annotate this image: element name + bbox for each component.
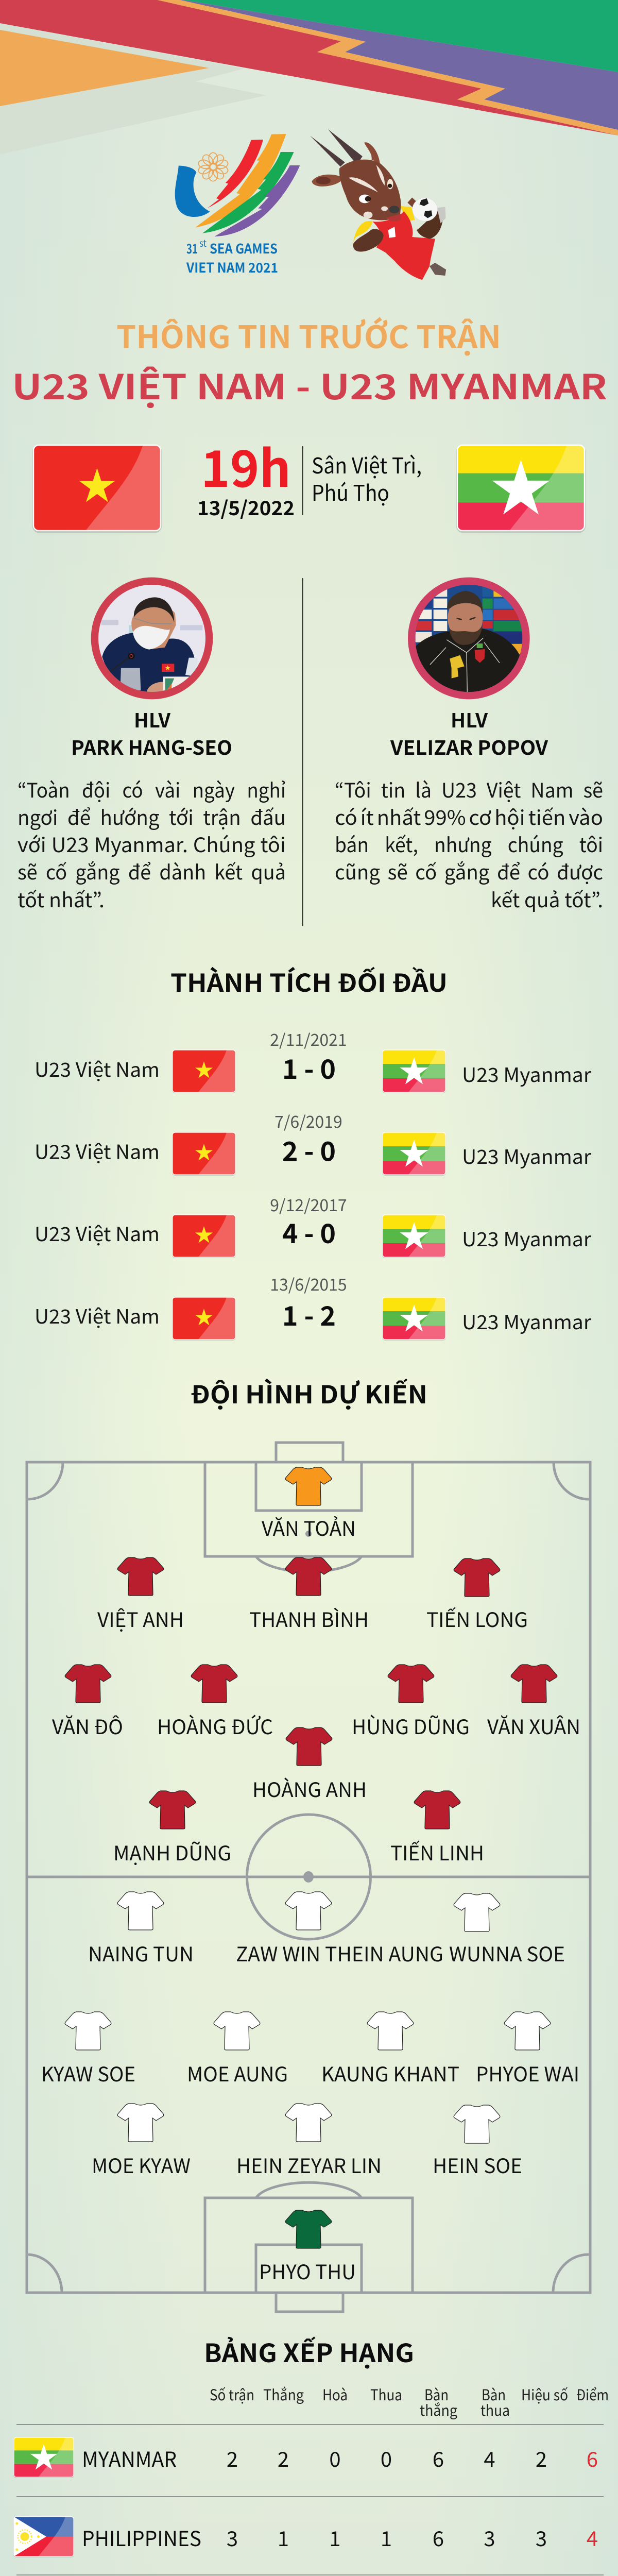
head-to-head match 13/6/2015: U23 Việt Nam [35,1301,160,1329]
table header: Hiệu số [521,2383,568,2405]
row Philippines: 3 [227,2522,238,2552]
player Zaw Win Thein Aung: ZAW WIN THEIN AUNG [236,1939,443,1968]
quote: bán kết, nhưng chúng tôi [335,829,603,858]
head-to-head match 13/6/2015: 1 - 2 [282,1295,336,1333]
title line 2: U23 VIỆT NAM - U23 MYANMAR [12,360,607,410]
head-to-head match 13/6/2015: U23 Myanmar [462,1307,591,1335]
goalkeeper Phyo Thu [259,2210,356,2285]
Vietnam lineup [52,1467,580,1867]
player Hùng Dũng: HÙNG DŨNG [352,1711,470,1740]
mascot: sao la with football [310,129,446,280]
goalkeeper Văn Toản [262,1467,356,1542]
player Thanh Bình: THANH BÌNH [249,1604,369,1633]
row Myanmar [13,2437,598,2478]
player Mạnh Dũng: MẠNH DŨNG [113,1838,231,1867]
coach title: HLV [451,705,488,733]
row Philippines: 3 [484,2522,495,2552]
quote: ngơi để hướng tới trận đấu [18,802,286,831]
table header: Thắng [263,2383,304,2405]
standings table [13,2383,609,2576]
head-to-head match 9/12/2017: U23 Myanmar [462,1224,591,1252]
player Tiến Long [426,1558,528,1633]
match date: 13/5/2022 [197,493,295,521]
logo mark swooshes [175,134,300,236]
row Myanmar: 0 [381,2443,392,2473]
player Hoàng Đức: HOÀNG ĐỨC [157,1711,273,1740]
player Zaw Win Thein Aung [236,1892,443,1968]
row Philippines: 3 [536,2522,547,2552]
head-to-head match 7/6/2019 [35,1109,591,1176]
player Văn Xuân [487,1665,580,1740]
logo text superscript: st [199,236,207,250]
flag: Myanmar large [456,445,586,533]
quote: cũng sẽ cố gắng để có được [335,857,603,886]
panel: coach Velizar Popov [335,578,603,913]
coach name: PARK HANG-SEO [71,732,232,760]
row Myanmar: 6 [433,2443,444,2473]
player Naing Tun: NAING TUN [88,1939,194,1968]
portrait: Park Hang-seo [91,578,213,699]
row Myanmar: 0 [329,2443,341,2473]
logo text sea games: SEA GAMES [210,239,278,258]
player Văn Xuân: VĂN XUÂN [487,1711,580,1740]
venue line 2: Phú Thọ [312,476,389,507]
player Văn Đô: VĂN ĐÔ [52,1711,123,1740]
match time: 19h [201,429,291,502]
table header: Số trận [210,2383,254,2405]
title line 1: THÔNG TIN TRƯỚC TRẬN [116,312,501,358]
quote: với U23 Myanmar. Chúng tôi [18,829,286,858]
row Philippines: PHILIPPINES [82,2522,201,2552]
player Hein Soe: HEIN SOE [433,2150,522,2179]
table header: thua [480,2399,510,2420]
player Wunna Soe [449,1893,565,1968]
row Philippines: 1 [278,2522,289,2552]
player Phyoe Wai: PHYOE WAI [476,2059,579,2088]
row Myanmar: MYANMAR [82,2443,177,2473]
player Hein Zeyar Lin: HEIN ZEYAR LIN [236,2150,382,2179]
player Hein Soe [433,2105,522,2179]
quote: có ít nhất 99% cơ hội tiến vào [335,802,603,831]
row Philippines: 4 [587,2522,598,2552]
row Myanmar: 2 [536,2443,547,2473]
table header: thắng [420,2399,457,2420]
head-to-head match 13/6/2015 [35,1272,591,1341]
player Kyaw Soe: KYAW SOE [41,2059,135,2088]
football pitch [27,1443,590,2312]
table header [210,2383,609,2420]
player Hoàng Anh [252,1727,367,1803]
quote: kết quả tốt”. [491,885,603,913]
venue line 1: Sân Việt Trì, [312,449,422,480]
head-to-head match 2/11/2021: U23 Myanmar [462,1059,591,1088]
player Kaung Khant [321,2012,459,2088]
head-to-head match 9/12/2017: U23 Việt Nam [35,1218,160,1247]
player Mạnh Dũng [113,1791,231,1867]
Myanmar lineup [41,1892,579,2285]
row Philippines: 6 [433,2522,444,2552]
player Tiến Linh [390,1791,484,1867]
player Tiến Linh: TIẾN LINH [390,1838,484,1867]
head-to-head match 2/11/2021: 1 - 0 [282,1048,336,1087]
heading: head-to-head: THÀNH TÍCH ĐỐI ĐẦU [170,963,448,999]
player Hùng Dũng [352,1665,470,1740]
quote: “Tôi tin là U23 Việt Nam sẽ [335,775,603,804]
head-to-head match 9/12/2017: 4 - 0 [282,1212,336,1251]
player Wunna Soe: WUNNA SOE [449,1939,565,1968]
player Naing Tun [88,1892,194,1968]
vertical divider between coaches [302,578,303,926]
goalkeeper Phyo Thu: PHYO THU [259,2257,356,2285]
row Myanmar: 6 [587,2443,598,2473]
head-to-head match 13/6/2015: 13/6/2015 [270,1272,347,1296]
quote [18,775,286,913]
head-to-head match 9/12/2017 [35,1193,591,1258]
goalkeeper Văn Toản: VĂN TOẢN [262,1513,356,1542]
quote: tốt nhất”. [18,885,105,913]
head-to-head match 7/6/2019: U23 Việt Nam [35,1137,160,1164]
player Việt Anh: VIỆT ANH [97,1604,184,1633]
player Hein Zeyar Lin [236,2104,382,2179]
row Philippines: 1 [329,2522,341,2552]
player Việt Anh [97,1557,184,1633]
table header: Bàn [482,2383,506,2405]
head-to-head match 2/11/2021 [35,1027,591,1093]
flag: Vietnam large [32,445,162,533]
player Kaung Khant: KAUNG KHANT [321,2059,459,2088]
logo text line 1: 31 [186,239,198,258]
panel: coach Park Hang-seo [18,578,286,913]
player Moe Aung: MOE AUNG [187,2059,288,2088]
player Moe Aung [187,2012,288,2088]
head-to-head match 7/6/2019: 2 - 0 [282,1130,336,1168]
player Thanh Bình [249,1557,369,1633]
top decorative colour bands [0,0,618,155]
table header: Bàn [424,2383,449,2405]
row Myanmar: 2 [278,2443,289,2473]
player Hoàng Đức [157,1665,273,1740]
player Phyoe Wai [476,2012,579,2088]
divider [302,446,303,515]
player Kyaw Soe [41,2012,135,2088]
player Tiến Long: TIẾN LONG [426,1604,528,1633]
head-to-head match 7/6/2019: 7/6/2019 [274,1109,342,1133]
table header: Hoà [322,2383,348,2405]
quote [335,775,603,913]
player Hoàng Anh: HOÀNG ANH [252,1774,367,1803]
row Myanmar: 4 [484,2443,495,2473]
head-to-head match 7/6/2019: U23 Myanmar [462,1141,591,1170]
quote: sẽ cố gắng để dành kết quả [18,857,286,886]
quote: “Toàn đội có vài ngày nghỉ [18,775,286,804]
table header: Thua [370,2383,402,2405]
heading: expected lineups: ĐỘI HÌNH DỰ KIẾN [191,1375,427,1411]
player Văn Đô [52,1665,123,1740]
head-to-head match 2/11/2021: 2/11/2021 [270,1027,347,1051]
logo: 31st SEA Games [175,134,300,277]
head-to-head match 9/12/2017: 9/12/2017 [270,1193,347,1216]
coach name: VELIZAR POPOV [390,732,548,760]
row Philippines [13,2517,598,2557]
player Moe Kyaw [92,2104,191,2179]
heading: standings: BẢNG XẾP HẠNG [204,2333,414,2370]
logo text line 2: VIET NAM 2021 [186,258,278,277]
row Philippines: 1 [381,2522,392,2552]
head-to-head match 2/11/2021: U23 Việt Nam [35,1054,160,1082]
row Myanmar: 2 [227,2443,238,2473]
player Moe Kyaw: MOE KYAW [92,2150,191,2179]
portrait: Velizar Popov [408,578,530,699]
coach title: HLV [134,705,170,733]
table header: Điểm [576,2383,609,2405]
